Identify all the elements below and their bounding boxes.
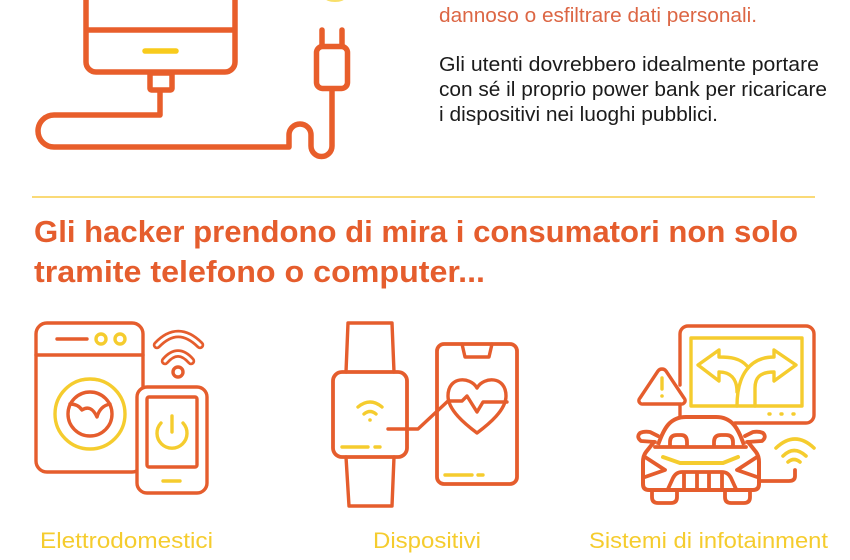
icon: phone charging with cable: [38, 0, 348, 156]
heart: [448, 380, 506, 433]
text: advice paragraph: [439, 54, 827, 126]
yellow fragment: [325, 0, 345, 2]
label: appliances: Elettrodomestici: [40, 528, 213, 553]
label: devices: Dispositivi: [373, 528, 481, 553]
phone body: [86, 0, 235, 72]
phone home bar: [145, 48, 176, 54]
wheels: [652, 490, 750, 503]
text: advice paragraph: Gli utenti dovrebbero idealmente portare: [439, 54, 819, 76]
yellow smile line: [663, 457, 738, 463]
watch straps: [346, 323, 394, 506]
watch body: [333, 372, 407, 457]
icon: smart appliances: [36, 323, 207, 493]
charging cable: [38, 90, 332, 156]
warning triangle: [639, 369, 685, 404]
pulse line: [388, 396, 507, 429]
fork arrows: [698, 350, 796, 406]
watch wifi: [358, 402, 382, 414]
icon: smartwatch and heart-rate phone: [333, 323, 517, 506]
heading: tramite telefono o computer...: [34, 254, 485, 289]
text: warning in orange: dannoso o esfiltrare dati personali.: [439, 5, 757, 27]
grille: [668, 472, 736, 489]
phone: [437, 344, 517, 484]
wall plug: [322, 30, 342, 46]
headlights: [645, 457, 757, 477]
heading: [34, 214, 798, 289]
car wifi: [776, 439, 814, 462]
text: advice paragraph: i dispositivi nei luoghi pubblici.: [439, 104, 718, 126]
heading: Gli hacker prendono di mira i consumatori non solo: [34, 214, 798, 249]
infotainment screen: [680, 326, 814, 423]
washing machine: [36, 323, 143, 472]
car: [658, 417, 744, 445]
label: infotainment systems: Sistemi di infotainment: [589, 528, 828, 553]
charging connector: [150, 73, 172, 90]
car cable: [760, 470, 795, 481]
smartphone with power icon: [137, 387, 207, 493]
text: advice paragraph: con sé il proprio power bank per ricaricare: [439, 79, 827, 101]
wifi signal: [173, 367, 183, 377]
icon: connected car with infotainment: [638, 326, 814, 503]
